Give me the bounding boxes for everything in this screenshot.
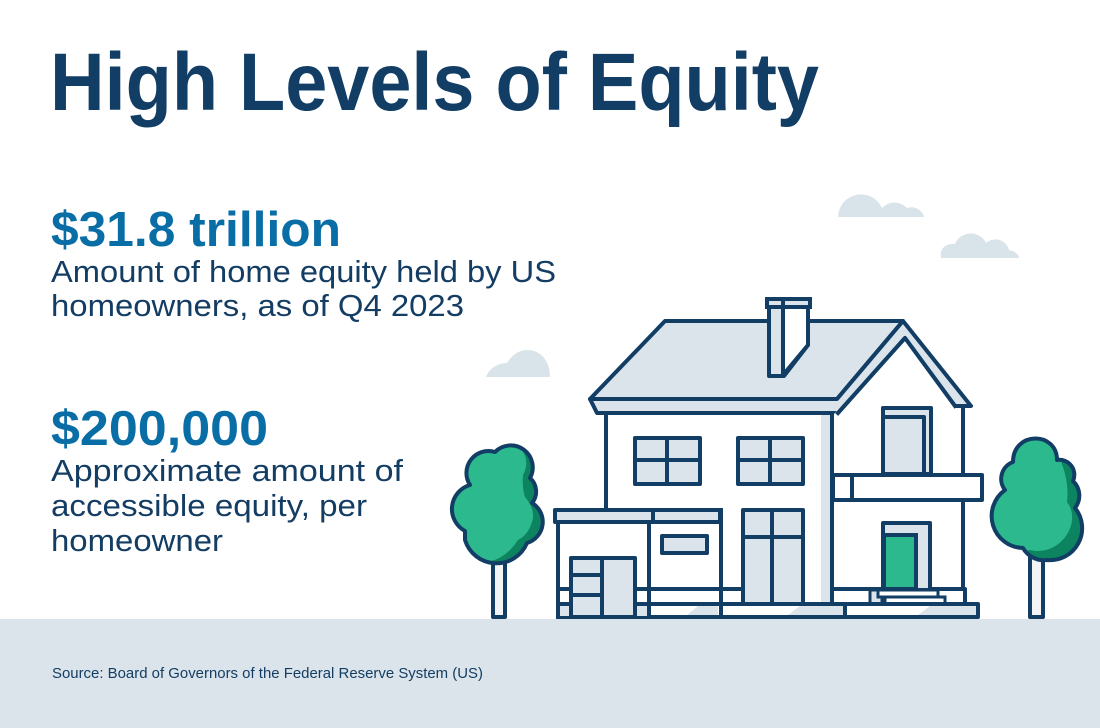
ground floor rails [558,589,742,616]
main roof [590,321,903,399]
gable wall [833,341,963,474]
garage door [571,558,635,617]
stat: home equity total [51,203,556,323]
illustration: house [555,299,982,617]
garage roof [555,510,720,522]
stat: accessible equity: Approximate amount of [51,453,403,488]
stat: home equity total: $31.8 trillion [51,203,341,257]
tree canopy [985,430,1082,560]
roof eave [590,321,971,413]
tall entry window [743,510,803,604]
stat: home equity total: Amount of home equity held by US [51,254,556,289]
upper left window [635,438,700,484]
ground band [0,619,1100,728]
house walls [606,406,963,604]
icon: cloud middle [486,350,550,377]
small window [662,536,707,553]
garage wing verticals [558,510,721,617]
balcony door [883,408,931,474]
upper right window [738,438,803,484]
tree trunk [1030,550,1043,617]
icon: left tree [445,435,543,617]
tree canopy [450,443,545,566]
stat: accessible equity [51,402,403,558]
icon: right tree [985,430,1082,617]
icon: cloud top left [838,194,924,217]
stat: accessible equity: homeowner [51,523,223,558]
base platform [558,604,978,617]
gable inner roofline [838,338,955,413]
title: High Levels of Equity [50,37,819,128]
stat: home equity total: homeowners, as of Q4 2023 [51,288,464,323]
garage wing wall [558,522,721,617]
porch rail and step walls [832,589,965,604]
tree trunk [493,560,505,617]
icon: cloud top right [941,233,1019,258]
balcony [833,475,982,500]
house wall front [606,413,832,605]
stat: accessible equity: accessible equity, per [51,488,367,523]
front door [883,523,930,590]
porch steps [870,590,945,604]
chimney [767,299,810,376]
source note: Source: Board of Governors of the Federal Reserve System (US) [52,665,483,682]
stat: accessible equity: $200,000 [51,402,268,456]
house wall shadow strip [821,413,832,604]
